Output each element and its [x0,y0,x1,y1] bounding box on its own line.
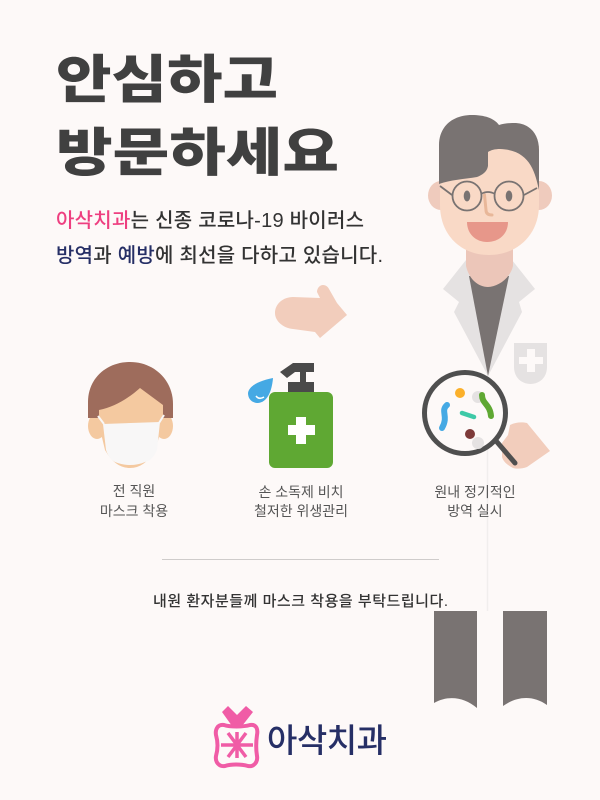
mask icon ears [88,413,173,439]
intro text: 아삭치과는 신종 코로나-19 바이러스 [56,209,364,232]
icon: pointing mitten hand [275,285,347,338]
label: inspection: 원내 정기적인 [434,484,516,500]
icon: hand sanitizer [248,363,333,468]
mask icon mask [103,422,160,465]
doctor coat [443,260,535,376]
magnifier handle [497,442,515,463]
notice text: 내원 환자분들께 마스크 착용을 부탁드립니다. [153,593,448,610]
sanitizer pump [280,363,314,393]
logo box [216,725,257,766]
doctor glasses [440,182,537,210]
title [56,52,339,183]
label: sanitizer [254,484,348,519]
sanitizer droplet [248,378,273,403]
label: mask [100,483,168,519]
label: mask: 전 직원 [113,483,155,499]
mask icon hair [88,362,173,418]
label: mask: 마스크 착용 [100,503,168,519]
doctor shirt [469,276,509,376]
logo ribbon [222,706,253,726]
logo wordmark: 아삭치과 [267,722,387,759]
magnifier lens [424,372,506,454]
doctor trouser left [434,611,477,708]
doctor eyes [464,190,512,202]
doctor trouser right [503,611,547,706]
doctor face [440,146,539,255]
title: 방문하세요 [56,125,339,183]
germs [442,388,491,449]
magnifier holding hand [502,422,550,469]
doctor hair [439,115,539,190]
logo [216,706,387,766]
sanitizer bottle [269,392,333,468]
doctor mouth [467,222,508,242]
label: inspection: 방역 실시 [447,503,503,519]
icon: person wearing mask [88,362,173,468]
doctor ears [428,181,552,210]
label: sanitizer: 철저한 위생관리 [254,503,348,519]
illustration: doctor [428,115,552,708]
doctor neck [466,240,513,287]
logo asterisk [221,732,253,758]
title: 안심하고 [56,52,278,110]
label: inspection [434,484,516,519]
label: sanitizer: 손 소독제 비치 [258,484,344,500]
doctor badge [514,343,547,384]
icon: magnifying glass with germs [424,372,550,469]
intro text: 방역과 예방에 최선을 다하고 있습니다. [56,244,383,267]
doctor nose [484,195,492,215]
sanitizer cross [288,417,315,444]
intro text [56,209,383,267]
mask icon face [99,388,163,468]
